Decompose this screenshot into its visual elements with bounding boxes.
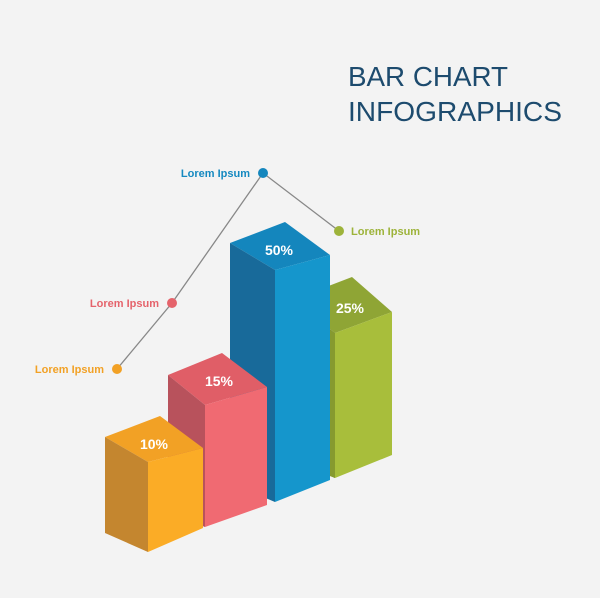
bar: pink 15% bbox=[168, 353, 267, 527]
bar: blue 50% bbox=[230, 222, 330, 502]
bar: green 25%: 25% bbox=[336, 300, 365, 316]
connector line bbox=[117, 173, 339, 369]
bar: pink 15%: 15% bbox=[205, 373, 234, 389]
title: INFOGRAPHICS bbox=[348, 96, 562, 127]
bar: green 25% bbox=[292, 277, 392, 478]
title bbox=[348, 61, 562, 127]
label: green point: Lorem Ipsum bbox=[351, 226, 420, 238]
bar: orange 10% bbox=[105, 416, 203, 552]
bar: blue 50%: 50% bbox=[265, 242, 294, 258]
label: orange point: Lorem Ipsum bbox=[35, 364, 104, 376]
label: pink point: Lorem Ipsum bbox=[90, 298, 159, 310]
title: BAR CHART bbox=[348, 61, 508, 92]
label: blue point: Lorem Ipsum bbox=[181, 168, 250, 180]
bar: orange 10%: 10% bbox=[140, 436, 169, 452]
